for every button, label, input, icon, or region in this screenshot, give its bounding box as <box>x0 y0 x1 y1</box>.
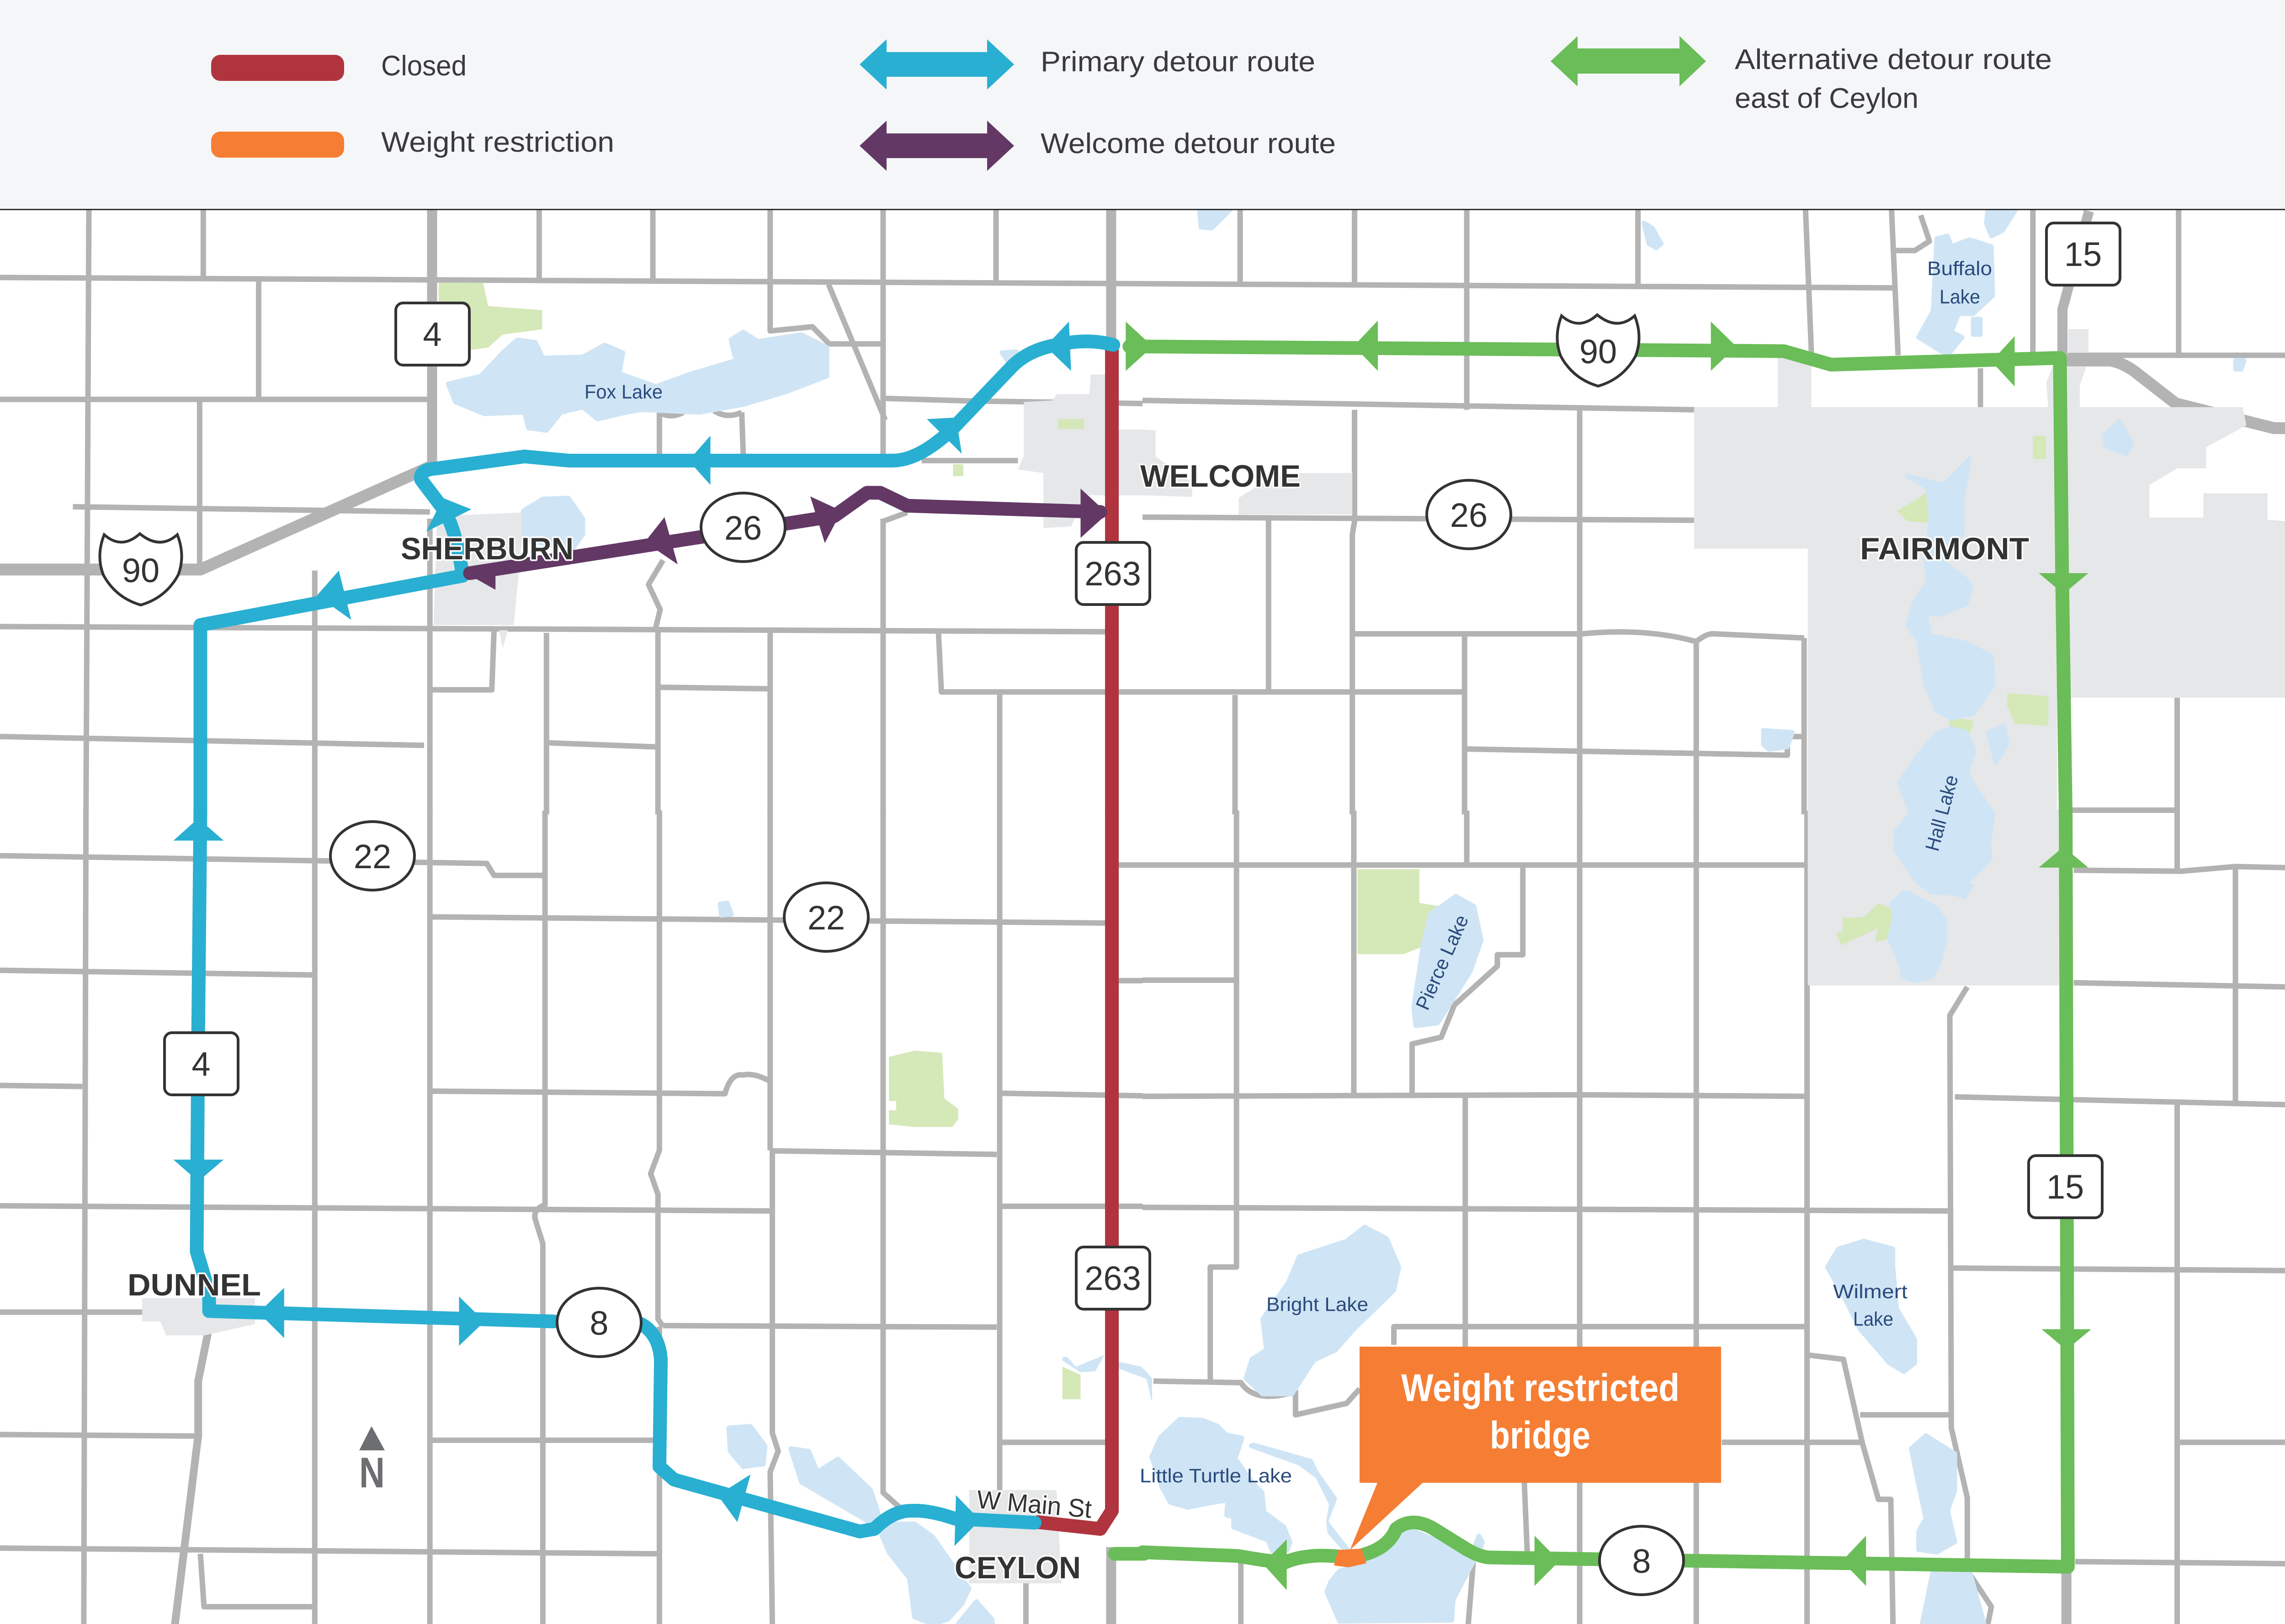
highway shield: 15 north <box>2046 223 2120 285</box>
legend: primary detour route: Primary detour route <box>1041 46 1315 78</box>
county marker: 8 east <box>1600 1526 1684 1595</box>
lake labels: Fox Lake <box>585 381 663 403</box>
legend panel <box>0 0 2285 210</box>
callout: weight restricted bridge <box>1350 1347 1721 1550</box>
interstate shield: 90 east <box>1557 315 1639 386</box>
legend: alternative detour route: Alternative detour route <box>1735 44 2052 75</box>
lake labels: Lake <box>1940 286 1980 308</box>
county marker: 8 west <box>557 1288 641 1357</box>
county marker: 22 west: 22 <box>354 838 391 876</box>
interstate shield: 90 west: 90 <box>122 552 159 589</box>
urban areas <box>142 329 2285 1583</box>
street label: W Main St: W Main St <box>976 1485 1093 1523</box>
county marker: 8 east: 8 <box>1632 1542 1651 1580</box>
lake labels: Bright Lake <box>1266 1294 1368 1316</box>
weight restricted bridge segment <box>1334 1549 1366 1567</box>
interstate shield: 90 east: 90 <box>1579 333 1617 371</box>
legend: alternative detour route: east of Ceylon <box>1735 83 1918 114</box>
lake labels <box>585 258 1992 1487</box>
legend: primary detour route <box>860 39 1315 90</box>
highway shield: 4 north: 4 <box>423 315 442 353</box>
highway shield: 15 south: 15 <box>2046 1168 2084 1206</box>
lake labels: Wilmert <box>1833 1281 1908 1303</box>
callout: weight restricted bridge: Weight restricted <box>1401 1366 1679 1409</box>
highway shield: 4 south <box>165 1033 238 1095</box>
highway shield: 15 south <box>2029 1156 2102 1218</box>
primary detour route <box>173 322 1113 1546</box>
city labels: SHERBURN <box>401 531 574 566</box>
city labels: CEYLON <box>955 1550 1081 1585</box>
legend: weight restriction <box>211 127 614 158</box>
Welcome detour route <box>468 488 1107 590</box>
county marker: 26 east <box>1427 480 1511 549</box>
county marker: 22 west <box>330 822 414 890</box>
legend: closed <box>211 50 467 82</box>
lakes <box>448 210 2244 1624</box>
highway shield: 4 north <box>396 303 469 365</box>
legend: weight restriction: Weight restriction <box>381 127 614 158</box>
lake labels: Hall Lake <box>1921 773 1963 854</box>
lake labels: Buffalo <box>1927 258 1992 280</box>
county marker: 8 west: 8 <box>590 1304 609 1342</box>
legend: Welcome detour route <box>860 121 1336 171</box>
city labels <box>128 459 2029 1585</box>
legend: Welcome detour route: Welcome detour route <box>1041 128 1336 159</box>
county marker: 26 east: 26 <box>1450 496 1488 534</box>
lake labels: Lake <box>1853 1308 1893 1330</box>
highway shield: 263 north: 263 <box>1084 555 1141 593</box>
parks <box>439 283 2048 1399</box>
highway shield: 263 south <box>1076 1247 1150 1309</box>
north arrow: N <box>359 1449 385 1497</box>
city labels: FAIRMONT <box>1860 531 2029 566</box>
highway shield: 263 north <box>1076 542 1150 605</box>
city labels: WELCOME <box>1140 459 1301 494</box>
highway shield: 4 south: 4 <box>191 1045 211 1083</box>
county marker: 26 west <box>701 493 785 562</box>
interstate shield: 90 west <box>100 534 182 605</box>
legend: closed: Closed <box>381 50 467 82</box>
legend: alternative detour route <box>1551 36 2052 114</box>
closed route <box>1038 348 1112 1529</box>
highway shield: 263 south: 263 <box>1084 1259 1141 1297</box>
lake labels: Pierce Lake <box>1412 912 1473 1013</box>
alternative detour route <box>1115 320 2091 1590</box>
highway shield: 15 north: 15 <box>2064 235 2102 273</box>
city labels: DUNNEL <box>128 1268 261 1302</box>
county marker: 22 east <box>784 883 868 951</box>
lake labels: Little Turtle Lake <box>1140 1465 1292 1487</box>
north arrow <box>359 1426 385 1497</box>
county marker: 22 east: 22 <box>808 899 845 937</box>
county marker: 26 west: 26 <box>724 509 762 547</box>
callout: weight restricted bridge: bridge <box>1490 1414 1590 1457</box>
